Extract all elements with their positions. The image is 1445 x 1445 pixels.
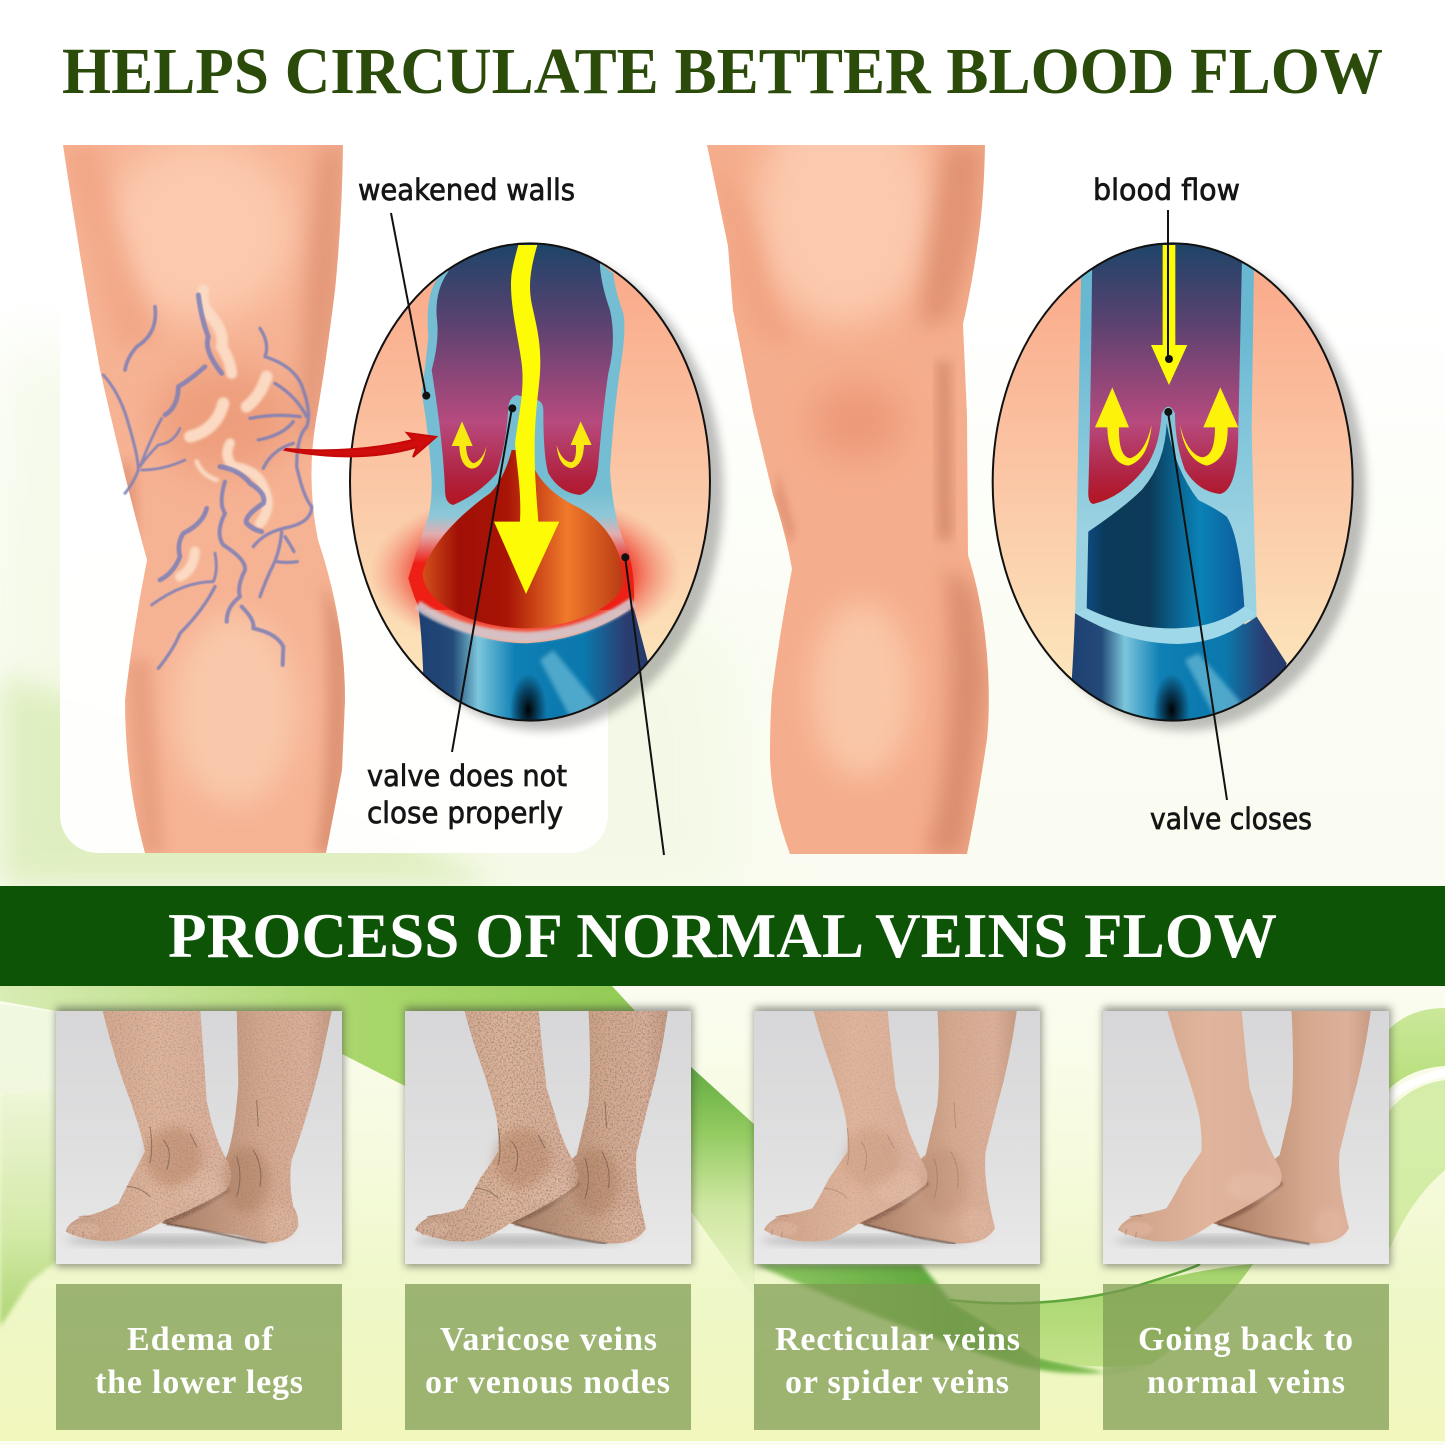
caption: edema: Edema of (127, 1321, 274, 1358)
caption: normal: normal veins (1147, 1364, 1345, 1401)
caption: reticular: Recticular veins (775, 1321, 1020, 1358)
arrow: red pointer to vein (285, 433, 436, 457)
swoosh centre gap (690, 1066, 755, 1300)
leader lines (391, 210, 1227, 855)
diagram: healthy vein (993, 243, 1366, 747)
caption: normal: Going back to (1138, 1321, 1353, 1358)
label: weakened walls: weakened walls (358, 173, 575, 207)
label: valve does not close properly (367, 759, 567, 830)
illustration: healthy right leg (707, 95, 989, 856)
title: HELPS CIRCULATE BETTER BLOOD FLOW (62, 35, 1383, 108)
panel: varicose photo (405, 1007, 693, 1267)
swoosh left (0, 1090, 56, 1327)
panel: edema photo (56, 1007, 344, 1267)
caption: reticular (754, 1284, 1040, 1430)
label: valve does not close properly: close properly (367, 796, 563, 830)
caption: normal (1103, 1284, 1389, 1430)
caption: edema: the lower legs (95, 1364, 303, 1401)
varicose bulges and veins (103, 290, 312, 668)
swoosh right (1388, 1008, 1445, 1090)
diagram: damaged vein (350, 243, 723, 747)
caption: varicose (405, 1284, 691, 1430)
panel: normal photo (1103, 1007, 1391, 1267)
yellow down arrow (1151, 245, 1187, 385)
banner (0, 886, 1445, 986)
banner: PROCESS OF NORMAL VEINS FLOW (168, 900, 1277, 971)
panel: reticular photo (754, 1007, 1042, 1267)
label: blood flow: blood flow (1093, 173, 1240, 207)
caption: reticular: or spider veins (785, 1364, 1009, 1401)
label: valve closes: valve closes (1150, 802, 1312, 836)
small yellow return arrows (452, 421, 487, 469)
caption: varicose: or venous nodes (425, 1364, 670, 1401)
swoosh top band (0, 986, 636, 1086)
caption: varicose: Varicose veins (440, 1321, 657, 1358)
label: valve does not close properly: valve does not (367, 759, 567, 793)
yellow flow arrow (494, 245, 559, 594)
illustration: left leg with varicose veins (62, 140, 350, 853)
white diagram backdrop (60, 145, 608, 853)
caption: edema (56, 1284, 342, 1430)
